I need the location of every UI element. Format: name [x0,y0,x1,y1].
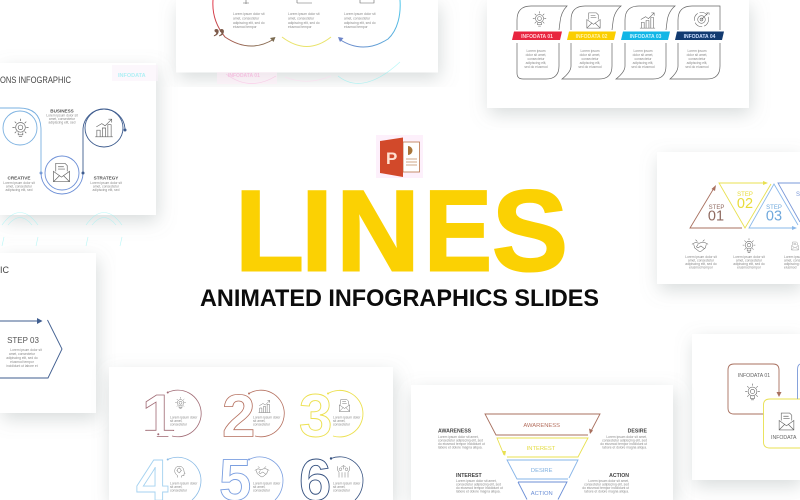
icon: bulb [533,11,546,26]
label: creative: CREATIVE [8,176,30,180]
number 3 [299,382,363,450]
text: column 3: Lorem ipsum [633,49,653,53]
number 5 [219,448,283,500]
label: creative: adipiscing elit, sed [6,188,33,192]
text: col 2: eiusmod tempor [737,266,762,270]
label: interest: INTEREST [456,473,482,479]
text: column 1: adipiscing elit, [526,61,546,65]
text: item 3: Lorem ipsum dolor [333,416,361,420]
title: LINES: N [336,168,420,296]
text: item 5: consectetur [253,488,271,492]
text: column 1: dolor sit amet, [526,53,546,57]
triangle 02 [719,183,771,228]
band: infodata 01 [512,32,562,40]
ghost artifacts: INFODATA [118,73,146,79]
text: item 5: Lorem ipsum dolor [253,482,281,486]
text: item 5: sit amet, [253,485,266,489]
label: business: amet, consectetur [49,117,76,121]
text: item 4: sit amet, [170,485,183,489]
text: column 2: Lorem ipsum [580,49,600,53]
text: column two: eiusmod tempor [288,25,313,29]
number 1: 1 [142,382,175,450]
icon: target [694,12,709,27]
circle: chart [85,109,123,147]
label: awareness: labore et dolore magna aliqua. [438,446,483,450]
subtitle: ANIMATED INFOGRAPHICS SLIDES [200,285,599,312]
label: action: consectetur adipiscing elit, sed [584,482,629,486]
title: LINES: I [301,168,333,296]
icon: chart [640,13,655,28]
connector dot dark [82,172,84,174]
label: desire: consectetur adipiscing elit, sed [602,438,647,442]
circle: bulb [3,111,37,145]
label: step 03: 03 [766,208,782,224]
arrow head 02 [763,181,768,185]
icon: powerpoint logo: P [386,149,397,168]
label: strategy [90,176,122,192]
icon: bulb [745,384,760,400]
text: item 6: Lorem ipsum dolor [333,482,361,486]
end dot [124,128,126,132]
icon: envelope [587,13,600,28]
connector: blue [0,108,41,173]
number 4 [136,448,201,500]
label: awareness: do eiusmod tempor incididunt ut [438,442,485,446]
text: col 1: adipiscing elit, sed do [685,262,717,266]
icon: envelope [339,400,350,412]
text: column 3: dolor sit amet, [633,53,653,57]
label: interest: consectetur adipiscing elit, sed [456,482,501,486]
icon: handshake [255,466,269,477]
text: column two: adipiscing elit, sed do [288,21,320,25]
text: col 1: Lorem ipsum dolor sit [685,255,717,259]
funnel tier: desire [507,460,578,479]
text: item 3: sit amet, [333,419,346,423]
number 1 [145,390,202,438]
icon: chart [258,400,270,412]
panel: left step slide [0,253,96,413]
icon: envelope [779,413,794,430]
text: column one: adipiscing elit, sed do [233,21,265,25]
label: interest: labore et dolore magna aliqua. [456,490,501,494]
text: column three: eiusmod tempor [344,25,369,29]
label: desire: DESIRE [628,429,648,435]
funnel tier: interest: INTEREST [527,446,556,452]
text: item 1: consectetur [170,422,188,426]
shape: column 4 [670,6,720,79]
title: LINES: L [235,168,304,296]
label: step 02: STEP [737,192,753,198]
text: step body: adipiscing elit, sed do [6,356,38,360]
text: column 2: adipiscing elit, [580,61,600,65]
label: step 01: STEP [709,205,724,211]
funnel tier: action [518,482,567,500]
connector: arc under [41,173,83,194]
box 3 [798,364,800,399]
label: step 03: STEP [766,205,782,211]
text: column 2: dolor sit amet, [580,53,600,57]
arc: step two [282,37,331,46]
label: strategy: STRATEGY [94,176,118,180]
arrow head 03 [792,226,797,230]
label: desire [600,429,648,450]
text: item 2: Lorem ipsum dolor [253,416,281,420]
triangle 01 [690,188,742,228]
ghost artifacts below top slide: INFODATA 01 [228,73,260,79]
text: col 1: eiusmod tempor [689,266,714,270]
box 2 [764,399,800,448]
title: LINES: E [424,168,492,296]
title: LINES [235,168,568,296]
text: column three: Lorem ipsum dolor sit [344,12,376,16]
text: column two: Lorem ipsum dolor sit [288,12,320,16]
icon: powerpoint logo [376,135,423,178]
label: interest: Lorem ipsum dolor sit amet, [456,479,497,483]
icon: envelope [792,242,798,250]
text: column 2: consectetur [581,57,599,61]
text: column 4: dolor sit amet, [687,53,707,57]
circle: envelope [45,156,79,190]
funnel tier: action: ACTION [531,491,553,497]
panel: right triangles slide [657,152,800,284]
arrow head box 1 [776,392,782,397]
text: col 2: Lorem ipsum dolor sit [733,255,765,259]
text: item 4: Lorem ipsum dolor [170,482,198,486]
shape: column 1 [517,6,567,79]
label: interest [456,473,503,494]
text: column 4: consectetur [688,57,706,61]
text: item 4: consectetur [170,488,188,492]
text: column three: adipiscing elit, sed do [344,21,376,25]
arrow: step line [0,320,38,322]
label: business: adipiscing elit, sed [49,120,76,124]
band: infodata 03: INFODATA 03 [630,34,662,40]
number 6 [299,448,363,500]
label: business [46,108,78,124]
text: column 1: sed do eiusmod [524,65,548,69]
arrow head: step one [270,37,276,42]
label: step 01: 01 [708,208,724,224]
funnel tier: awareness [485,414,600,435]
text: col 2: amet, consectetur [736,258,763,262]
text: item 2: consectetur [253,422,271,426]
title fragment: IC [0,265,10,275]
text: column one: Lorem ipsum dolor sit [233,12,265,16]
number 3: 3 [299,382,332,450]
text: column one: eiusmod tempor [233,25,258,29]
label: action: do eiusmod tempor incididunt ut [582,486,629,490]
shape: column 3 [616,6,675,79]
text: column 3: consectetur [634,57,652,61]
arrow head [37,318,42,324]
quote marks: ” [213,25,225,51]
text: item 6: consectetur [333,488,351,492]
band: infodata 02 [567,32,616,40]
text: column 4: sed do eiusmod [685,65,709,69]
icon: head [175,466,185,478]
label: action: Lorem ipsum dolor sit amet, [588,479,629,483]
box 1 [728,364,779,414]
label: action [582,473,629,494]
label: business: Lorem ipsum dolor sit [46,114,78,118]
text: col 2: adipiscing elit, sed do [733,262,765,266]
label: desire: labore et dolore magna aliqua. [602,446,647,450]
funnel tier: awareness: AWARENESS [523,423,560,429]
icon: people [338,466,350,478]
connector dot [40,172,42,174]
connector: dark [83,109,125,173]
text: item 1: Lorem ipsum dolor [170,416,198,420]
ghost artifacts [2,65,158,246]
text: column 3: sed do eiusmod [631,65,655,69]
arrow head 01 [712,185,716,191]
text: step body: Lorem ipsum dolor sit [10,348,42,352]
icon: bulb [743,238,755,252]
label: step 02: 02 [737,196,753,212]
funnel tier: desire: DESIRE [531,468,553,474]
label: creative: amet, consectetur [6,184,33,188]
title: ONS INFOGRAPHIC [0,75,71,86]
label: desire: do eiusmod tempor incididunt ut [600,442,647,446]
triangle 03 [749,184,798,228]
label: business: BUSINESS [50,108,74,114]
text: column 1: consectetur [527,57,545,61]
text: column one: amet, consectetur [233,16,260,20]
label: desire: Lorem ipsum dolor sit amet, [606,435,647,439]
arc: step one [213,0,274,46]
icons cut by top edge [243,0,374,4]
panel: numbers slide [109,367,393,500]
text: column 3: adipiscing elit, [633,61,653,65]
hexagon edge [0,320,62,378]
label: creative [3,176,35,192]
label: awareness: AWARENESS [438,429,472,435]
title: LINES: S [492,168,568,296]
number 2 [222,382,284,450]
ghost artifacts below top slide [217,62,400,84]
text: column 4: adipiscing elit, [687,61,707,65]
text: step body: amet, consectetur [9,352,36,356]
number 2: 2 [222,382,255,450]
band: infodata 03 [621,32,670,40]
icon: handshake [692,240,708,251]
icon: bulb [12,119,29,137]
text: col 3: eiusmod [784,266,797,270]
panel: left options slide [0,63,158,246]
arc: step three [339,0,400,47]
label: awareness: Lorem ipsum dolor sit amet, [438,435,479,439]
band: infodata 04 [675,32,724,40]
panel: right boxes slide [692,334,800,480]
label: creative: Lorem ipsum dolor sit [3,181,35,185]
text: item 1: sit amet, [170,419,183,423]
label: awareness: consectetur adipiscing elit, sed [438,438,483,442]
text: column 1: Lorem ipsum [526,49,546,53]
icon: chart [95,119,113,137]
text: column three: amet, consectetur [344,16,371,20]
triangle 04 [778,183,800,222]
panel: top center slide [176,0,438,84]
label: action: labore et dolore magna aliqua. [584,490,629,494]
text: item 6: sit amet, [333,485,346,489]
label: strategy: Lorem ipsum dolor sit [90,181,122,185]
icon: envelope [53,163,70,182]
label: action: ACTION [609,473,629,479]
panel: funnel slide [411,385,673,500]
funnel tier: interest [497,438,588,457]
label: infodata 01: INFODATA 01 [738,373,770,379]
heading: step 03: STEP 03 [7,336,39,345]
label: strategy: amet, consectetur [93,184,120,188]
label: awareness [438,429,485,450]
text: column 2: sed do eiusmod [578,65,602,69]
label: infodata 02: INFODATA [771,435,797,441]
text: item 2: sit amet, [253,419,266,423]
text: item 3: consectetur [333,422,351,426]
text: step body: eiusmod tempor [10,360,35,364]
text: column two: amet, consectetur [288,16,315,20]
band: infodata 02: INFODATA 02 [576,34,608,40]
shape: column 2 [562,6,621,79]
arrow head: step three [338,37,344,42]
panel: top right slide [487,0,749,108]
text: step body: incididunt ut labore et [6,364,38,368]
band: infodata 04: INFODATA 04 [684,34,716,40]
text: column 4: Lorem ipsum [687,49,707,53]
label: interest: do eiusmod tempor incididunt ut [456,486,503,490]
label: strategy: adipiscing elit, sed [93,188,120,192]
band: infodata 01: INFODATA 01 [521,34,553,40]
text: col 1: amet, consectetur [688,258,715,262]
icon: bulb [175,397,186,409]
